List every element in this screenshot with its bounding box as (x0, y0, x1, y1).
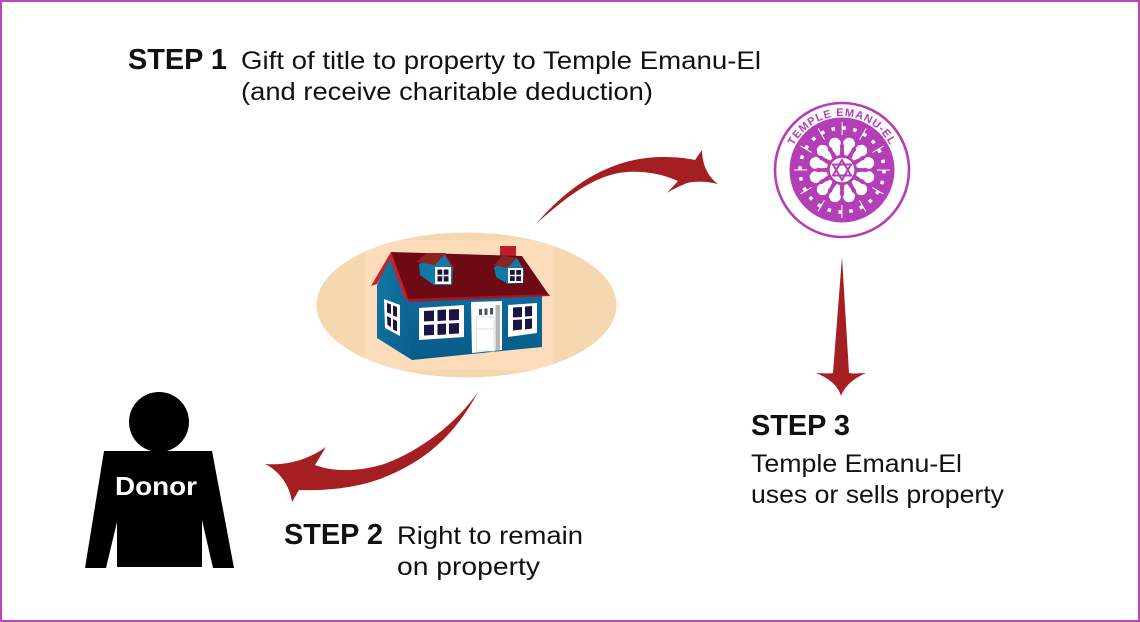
house with ellipse (316, 232, 616, 378)
arrow: house to temple (536, 150, 718, 224)
ellipse (316, 232, 616, 378)
step 2 text: STEP 2 (284, 519, 383, 551)
step 2 text (284, 519, 583, 581)
step 1 text: Gift of title to property to Temple Emanu-El (241, 47, 761, 75)
step 1 text (128, 44, 761, 106)
rose window (785, 113, 899, 227)
chimney (500, 246, 516, 258)
donor label: Donor (115, 471, 197, 501)
step 1 text: (and receive charitable deduction) (241, 78, 653, 106)
step 1 text: STEP 1 (128, 44, 227, 76)
side window (384, 299, 400, 336)
step 3 text: STEP 3 (751, 410, 850, 442)
arrow: house to donor (265, 392, 478, 502)
door (471, 301, 502, 353)
temple logo (774, 102, 910, 238)
front window (419, 305, 464, 340)
step 3 text (751, 410, 1005, 509)
dormer left (416, 253, 454, 285)
arrow: temple to step 3 (816, 257, 866, 396)
step 2 text: on property (397, 553, 541, 581)
logo text: TEMPLE EMANU-EL (787, 108, 894, 145)
dormer right (494, 256, 524, 284)
walls (377, 255, 412, 360)
step 3 text: uses or sells property (751, 481, 1005, 509)
right window (508, 303, 537, 337)
donor figure (85, 392, 234, 568)
roof (391, 252, 549, 300)
step 3 text: Temple Emanu-El (751, 450, 962, 478)
step 2 text: Right to remain (397, 522, 583, 550)
